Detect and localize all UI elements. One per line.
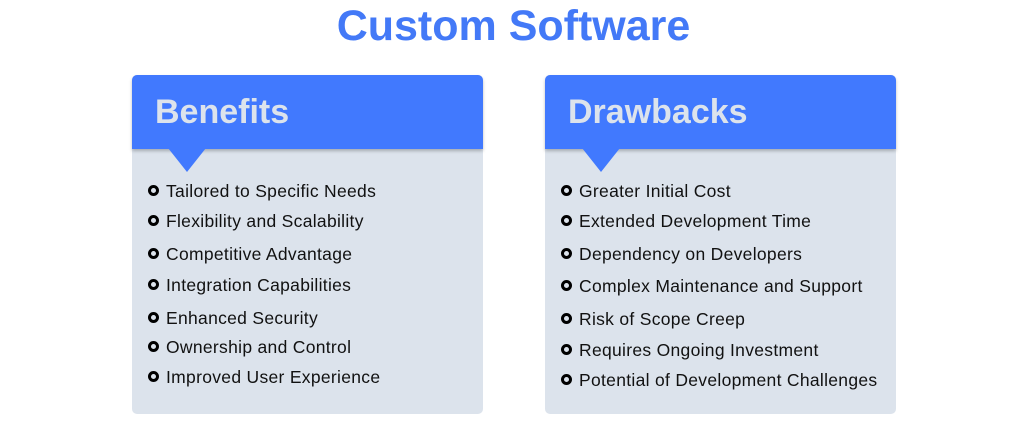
panel: benefits: Improved User Experience [166, 367, 380, 387]
panel: drawbacks: Dependency on Developers [579, 244, 802, 264]
header: benefits [132, 75, 483, 149]
panel: drawbacks: Risk of Scope Creep [579, 309, 745, 329]
panel: drawbacks: Complex Maintenance and Support [579, 276, 863, 296]
panel: drawbacks: Greater Initial Cost [579, 181, 731, 201]
header: drawbacks: Drawbacks [568, 93, 748, 131]
benefit items [148, 181, 380, 387]
pointer [582, 148, 620, 172]
header: drawbacks [545, 75, 896, 149]
panel: drawbacks: Requires Ongoing Investment [579, 340, 819, 360]
pointer [168, 148, 206, 172]
panel: drawbacks [545, 75, 896, 414]
panel: benefits: Integration Capabilities [166, 275, 351, 295]
title: Custom Software [337, 2, 690, 50]
drawback items [561, 181, 877, 390]
panel: benefits [132, 75, 483, 414]
panel: benefits: Enhanced Security [166, 308, 318, 328]
panel: drawbacks: Extended Development Time [579, 211, 811, 231]
panel: drawbacks: Potential of Development Challenges [579, 370, 877, 390]
panel: benefits: Tailored to Specific Needs [166, 181, 376, 201]
header: benefits: Benefits [155, 93, 289, 131]
panel: benefits: Competitive Advantage [166, 244, 352, 264]
panel: benefits: Flexibility and Scalability [166, 211, 364, 231]
panel: benefits: Ownership and Control [166, 337, 351, 357]
